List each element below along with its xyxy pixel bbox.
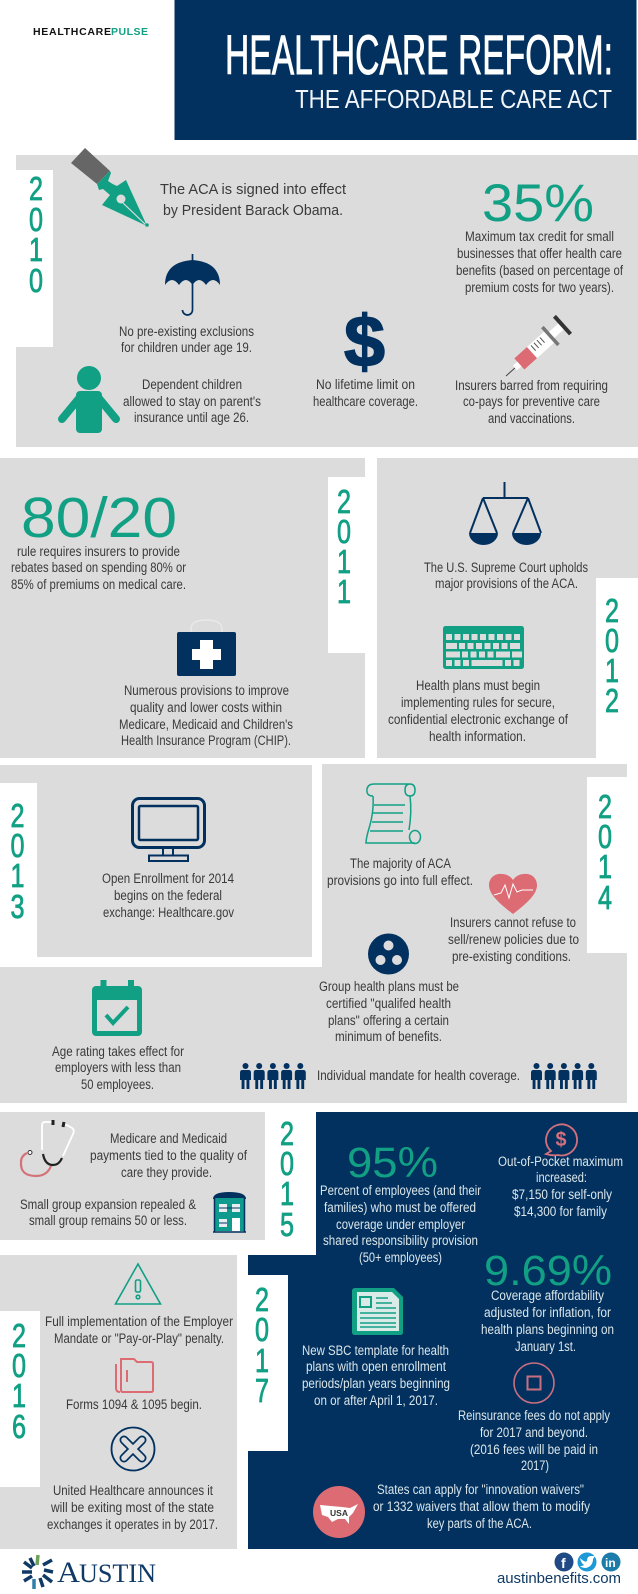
text: out-of-pocket: increased: bbox=[536, 1170, 587, 1185]
header banner bbox=[174, 0, 636, 140]
year 2013: 3 bbox=[10, 888, 24, 925]
text: co-pays: and vaccinations. bbox=[488, 411, 575, 426]
text: coverage affordability: January 1st. bbox=[515, 1339, 576, 1354]
text: cannot refuse: sell/renew policies due to bbox=[448, 932, 579, 947]
text: cannot refuse bbox=[448, 915, 579, 964]
text: ACA signed: The ACA is signed into effect bbox=[160, 181, 347, 198]
icon: heart bbox=[489, 874, 537, 914]
icon: three dots bbox=[368, 934, 409, 974]
text: SBC template: New SBC template for health bbox=[302, 1343, 449, 1358]
text: dependent children: allowed to stay on parent's bbox=[123, 394, 261, 409]
text: lifetime limit: No lifetime limit on bbox=[316, 377, 415, 392]
year 2016: 2 bbox=[12, 1317, 26, 1354]
year tab 2017: 2 bbox=[255, 1281, 269, 1318]
icon: syringe bbox=[498, 315, 572, 385]
text: dependent children: Dependent children bbox=[142, 377, 242, 392]
text: coverage affordability: adjusted for inflation, for bbox=[484, 1305, 611, 1320]
text: united healthcare: will be exiting most of the state bbox=[50, 1500, 214, 1515]
year 2014: 4 bbox=[598, 879, 612, 916]
text: lifetime limit: healthcare coverage. bbox=[313, 394, 418, 409]
text: out-of-pocket bbox=[498, 1154, 623, 1219]
icon: stethoscope bbox=[21, 1120, 74, 1176]
text: cannot refuse: pre-existing conditions. bbox=[452, 949, 571, 964]
text: percent of employees: (50+ employees) bbox=[359, 1250, 442, 1265]
text: secure exchange bbox=[388, 678, 568, 744]
text: innovation waivers bbox=[373, 1482, 590, 1531]
year 2011: 1 bbox=[337, 573, 351, 610]
text: provisions bbox=[119, 683, 293, 748]
icon: building bbox=[213, 1192, 246, 1232]
text: SBC template: on or after April 1, 2017. bbox=[314, 1393, 438, 1408]
text: secure exchange: implementing rules for secure, bbox=[401, 695, 555, 710]
text: rebate rule: rebates based on spending 80% or bbox=[11, 560, 186, 575]
text: tax credit bbox=[456, 229, 623, 295]
year 2010: 2 bbox=[29, 170, 43, 207]
icon: person bbox=[62, 366, 116, 433]
year 2010: 1 bbox=[29, 231, 43, 268]
year 2011: 2 bbox=[337, 483, 351, 520]
text: majority: The majority of ACA bbox=[350, 856, 451, 871]
text: provisions: Medicare, Medicaid and Children's bbox=[119, 717, 293, 732]
year 2015 bbox=[280, 1115, 294, 1243]
brand: HealthcarePulse bbox=[33, 26, 148, 38]
icon: warning triangle bbox=[116, 1264, 160, 1304]
icon: monitor bbox=[132, 798, 204, 861]
text: pre-existing: No pre-existing exclusions bbox=[119, 324, 254, 339]
text: ACA signed bbox=[160, 181, 347, 219]
logo: Austin bbox=[22, 1555, 156, 1589]
text: united healthcare: United Healthcare announces it bbox=[53, 1483, 213, 1498]
year 2014: 1 bbox=[598, 848, 612, 885]
text: co-pays: co-pays for preventive care bbox=[463, 394, 600, 409]
year 2015: 0 bbox=[280, 1145, 294, 1182]
icon: stop circle bbox=[514, 1363, 554, 1403]
text: coverage affordability: Coverage affordability bbox=[491, 1288, 604, 1303]
social icons: f bbox=[561, 1555, 566, 1571]
text: coverage affordability bbox=[481, 1288, 614, 1354]
panel: 2015 and 2017 navy bbox=[248, 1112, 638, 1549]
year 2012: 2 bbox=[605, 682, 619, 719]
icon: X circle bbox=[112, 1428, 154, 1470]
stat: 35%: 35% bbox=[482, 174, 594, 233]
panel: 2013 bbox=[0, 765, 312, 957]
year 2012: 1 bbox=[605, 652, 619, 689]
text: dependent children bbox=[123, 377, 261, 425]
text: medicare payments: Medicare and Medicaid bbox=[110, 1131, 227, 1146]
text: percent of employees: Percent of employees (and their bbox=[320, 1183, 481, 1198]
year 2016: 1 bbox=[12, 1377, 26, 1414]
icon: scroll bbox=[366, 784, 420, 844]
text: majority bbox=[327, 856, 473, 888]
year 2013 bbox=[10, 797, 24, 925]
year 2012: 2 bbox=[605, 592, 619, 629]
text: united healthcare: exchanges it operates in by 2017. bbox=[47, 1517, 218, 1532]
text: rebate rule: 85% of premiums on medical care. bbox=[11, 577, 186, 592]
icon: document bbox=[352, 1288, 403, 1335]
year 2010 bbox=[29, 170, 43, 299]
text: small group: Small group expansion repealed & bbox=[20, 1197, 196, 1212]
year tab 2017: 7 bbox=[255, 1372, 269, 1409]
text: coverage affordability: health plans beginning on bbox=[481, 1322, 614, 1337]
text: employer mandate bbox=[45, 1314, 233, 1346]
text: open enrollment: begins on the federal bbox=[114, 888, 222, 903]
panel: 2010 bbox=[16, 148, 638, 447]
icon: scales bbox=[469, 482, 541, 545]
text: open enrollment: Open Enrollment for 2014 bbox=[102, 871, 234, 886]
stat: 95%: 95% bbox=[347, 1139, 438, 1187]
text: open enrollment bbox=[102, 871, 234, 920]
year 2016: 6 bbox=[12, 1408, 26, 1445]
year 2013: 2 bbox=[10, 797, 24, 834]
icon: people left bbox=[240, 1063, 306, 1089]
year 2013: 0 bbox=[10, 827, 24, 864]
year 2010: 0 bbox=[29, 262, 43, 299]
year 2010: 0 bbox=[29, 201, 43, 238]
year 2015: 2 bbox=[280, 1115, 294, 1152]
text: reinsurance fees bbox=[458, 1408, 610, 1473]
stat: 9.69%: 9.69% bbox=[484, 1247, 612, 1295]
text: secure exchange: Health plans must begin bbox=[416, 678, 540, 693]
text: employer mandate: Mandate or "Pay-or-Play" penalty. bbox=[54, 1331, 224, 1346]
year tab 2017 bbox=[248, 1275, 288, 1451]
social icons bbox=[554, 1552, 620, 1572]
text: medicare payments bbox=[90, 1131, 247, 1180]
text: out-of-pocket: $7,150 for self-only bbox=[512, 1187, 612, 1202]
panel: 2014 bbox=[0, 764, 627, 1103]
year 2014 bbox=[598, 788, 612, 916]
year 2014: 2 bbox=[598, 788, 612, 825]
icon: keyboard bbox=[443, 626, 524, 669]
logo: Austin: USTIN bbox=[79, 1559, 156, 1588]
icon: fountain pen bbox=[71, 148, 149, 227]
text: co-pays bbox=[455, 378, 608, 426]
text: SBC template: periods/plan years beginning bbox=[302, 1376, 450, 1391]
brand: HealthcarePulse: PULSE bbox=[111, 26, 148, 38]
panel: 2011 bbox=[0, 458, 365, 758]
text: medicare payments: payments tied to the quality of bbox=[90, 1148, 247, 1163]
text: percent of employees: families) who must be offered bbox=[324, 1200, 476, 1215]
text: reinsurance fees: 2017) bbox=[521, 1458, 549, 1473]
text: cannot refuse: Insurers cannot refuse to bbox=[450, 915, 576, 930]
year 2015: 1 bbox=[280, 1175, 294, 1212]
text: medicare payments: care they provide. bbox=[121, 1165, 212, 1180]
text: small group: small group remains 50 or less. bbox=[29, 1213, 187, 1228]
text: reinsurance fees: Reinsurance fees do not apply bbox=[458, 1408, 610, 1423]
text: pre-existing: for children under age 19. bbox=[121, 340, 252, 355]
year 2016: 0 bbox=[12, 1347, 26, 1384]
text: majority: provisions go into full effect. bbox=[327, 873, 473, 888]
text: tax credit: Maximum tax credit for small bbox=[465, 229, 614, 244]
text: pre-existing bbox=[119, 324, 254, 355]
text: SBC template bbox=[302, 1343, 450, 1408]
icon: people right bbox=[531, 1063, 597, 1089]
icon: USA map bbox=[313, 1486, 365, 1538]
icon: dollar bubble: $ bbox=[556, 1129, 566, 1151]
icon: dollar: $ bbox=[344, 302, 385, 382]
text: provisions: Numerous provisions to improve bbox=[124, 683, 289, 698]
text: innovation waivers: States can apply for "innovation waivers" bbox=[377, 1482, 584, 1497]
text: SBC template: plans with open enrollment bbox=[306, 1359, 446, 1374]
social icons: in bbox=[605, 1556, 616, 1570]
year 2013: 1 bbox=[10, 857, 24, 894]
text: supreme court: The U.S. Supreme Court upholds bbox=[424, 560, 588, 575]
brand: HealthcarePulse: HEALTHCARE bbox=[33, 26, 111, 38]
text: group plans: minimum of benefits. bbox=[335, 1029, 442, 1044]
text: age rating: Age rating takes effect for bbox=[52, 1044, 184, 1059]
year 2016 bbox=[12, 1317, 26, 1445]
text: individual mandate: Individual mandate for health coverage. bbox=[317, 1068, 520, 1083]
text: open enrollment: exchange: Healthcare.gov bbox=[103, 905, 234, 920]
year tab 2017: 0 bbox=[255, 1311, 269, 1348]
text: ACA signed: by President Barack Obama. bbox=[163, 202, 343, 219]
text: provisions: quality and lower costs within bbox=[130, 700, 282, 715]
text: age rating: employers with less than bbox=[55, 1060, 181, 1075]
year 2012: 0 bbox=[605, 622, 619, 659]
text: supreme court: major provisions of the ACA. bbox=[435, 576, 578, 591]
text: provisions: Health Insurance Program (CHIP). bbox=[121, 733, 291, 748]
text: tax credit: premium costs for two years). bbox=[465, 280, 614, 295]
text: employer mandate: Full implementation of the Employer bbox=[45, 1314, 233, 1329]
year 2011: 0 bbox=[337, 513, 351, 550]
icon: folder bbox=[116, 1359, 153, 1392]
panel: 2016 bbox=[0, 1255, 237, 1549]
icon: USA map: USA bbox=[330, 1509, 348, 1518]
text: secure exchange: confidential electronic exchange of bbox=[388, 712, 568, 727]
text: out-of-pocket: $14,300 for family bbox=[514, 1204, 607, 1219]
text: percent of employees bbox=[320, 1183, 481, 1265]
text: rebate rule bbox=[11, 544, 186, 592]
text: group plans: plans" offering a certain bbox=[328, 1013, 449, 1028]
text: group plans bbox=[319, 979, 459, 1044]
text: percent of employees: shared responsibility provision bbox=[323, 1233, 478, 1248]
text: supreme court bbox=[424, 560, 588, 591]
icon: dollar bubble bbox=[546, 1124, 577, 1155]
text: dependent children: insurance until age 26. bbox=[134, 410, 249, 425]
text: secure exchange: health information. bbox=[429, 729, 526, 744]
text: lifetime limit bbox=[313, 377, 418, 409]
text: innovation waivers: key parts of the ACA. bbox=[427, 1516, 532, 1531]
text: percent of employees: coverage under employer bbox=[336, 1217, 465, 1232]
text: group plans: Group health plans must be bbox=[319, 979, 459, 994]
icon: Austin star bbox=[22, 1555, 53, 1589]
text: reinsurance fees: for 2017 and beyond. bbox=[480, 1425, 588, 1440]
text: age rating bbox=[52, 1044, 184, 1092]
panel: 2012 bbox=[377, 458, 638, 758]
text: innovation waivers: or 1332 waivers that allow them to modify bbox=[373, 1499, 590, 1514]
year 2012 bbox=[605, 592, 619, 719]
website: austinbenefits.com bbox=[497, 1570, 621, 1587]
text: group plans: certified "qualifed health bbox=[326, 996, 451, 1011]
text: forms: Forms 1094 & 1095 begin. bbox=[66, 1397, 202, 1412]
logo: Austin: A bbox=[57, 1556, 80, 1589]
icon: calendar bbox=[92, 980, 142, 1036]
text: age rating: 50 employees. bbox=[81, 1077, 154, 1092]
text: co-pays: Insurers barred from requiring bbox=[455, 378, 608, 393]
text: small group bbox=[20, 1197, 196, 1228]
stat: 80/20: 80/20 bbox=[21, 486, 177, 550]
icon: umbrella bbox=[165, 254, 220, 315]
year 2015: 5 bbox=[280, 1206, 294, 1243]
panel: 2015 left bbox=[0, 1112, 265, 1240]
icon: medical kit bbox=[177, 620, 236, 676]
text: reinsurance fees: (2016 fees will be paid in bbox=[470, 1442, 598, 1457]
year 2011 bbox=[337, 483, 351, 610]
year 2014: 0 bbox=[598, 818, 612, 855]
text: united healthcare bbox=[47, 1483, 218, 1532]
year tab 2017: 1 bbox=[255, 1342, 269, 1379]
year 2011: 1 bbox=[337, 543, 351, 580]
text: rebate rule: rule requires insurers to provide bbox=[17, 544, 180, 559]
